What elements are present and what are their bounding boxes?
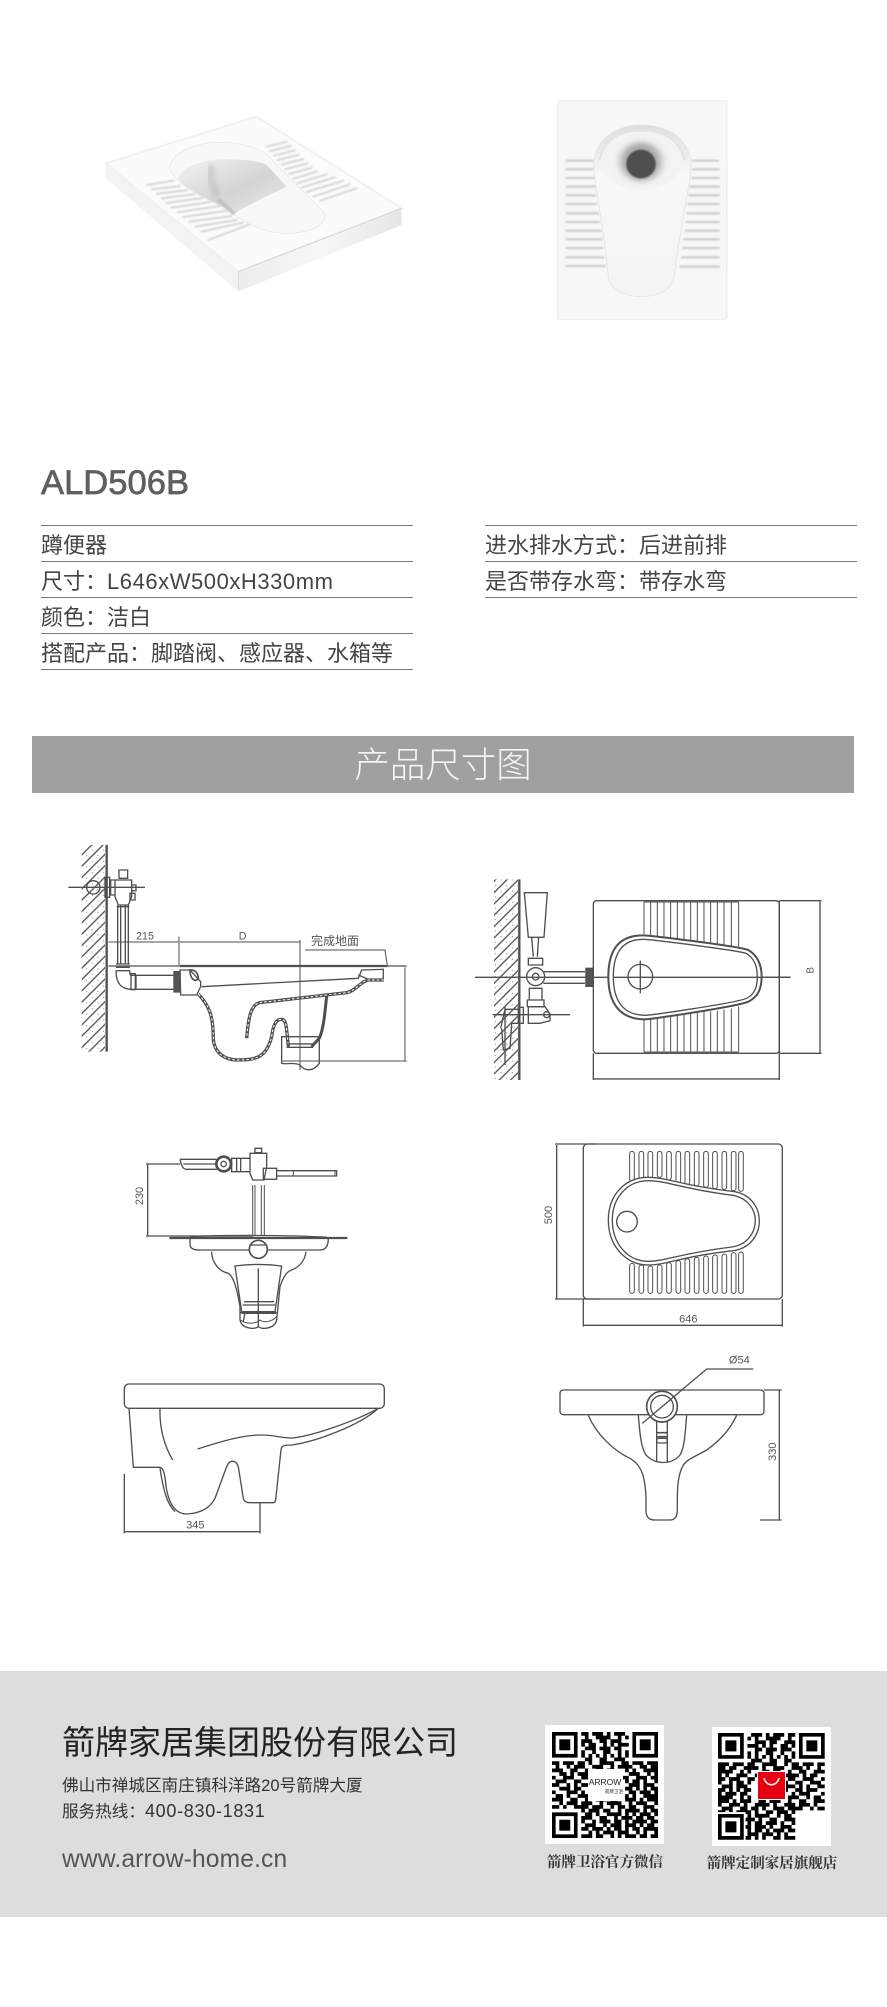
spec: type: 蹲便器 [41,533,107,558]
QR caption: flagship store: 箭牌定制家居旗舰店 [707,1854,838,1872]
product photo: top view [558,101,727,319]
spec: water inlet and outlet: 进水排水方式：后进前排 [485,533,727,558]
QR caption: bathroom WeChat: 箭牌卫浴官方微信 [547,1853,663,1871]
drawing: top view with valve [475,879,822,1080]
spec: size: 尺寸：L646xW500xH330mm [41,569,333,594]
ribs left [566,161,606,266]
bowl [594,125,691,297]
drawing: end profile [560,1354,782,1520]
dimensions: 500 [543,1206,555,1224]
dimensions [108,930,407,1070]
QR code: bathroom WeChat [545,1725,664,1844]
dimensions: 646 [679,1313,697,1325]
dimensions [642,1354,782,1520]
spec: accessories: 搭配产品：脚踏阀、感应器、水箱等 [41,641,393,666]
dimension 230: 230 [134,1187,146,1205]
service hotline: 服务热线：400-830-1831 [62,1801,265,1821]
dimensions: D [239,930,247,942]
drawing: top view with dimensions [543,1144,782,1327]
website: www.arrow-home.cn [62,1846,287,1873]
dimension 345 [124,1474,260,1533]
body [129,1408,378,1514]
trap [235,1264,282,1327]
dimension 345: 345 [186,1519,204,1531]
bowl [608,935,791,1019]
QR code: bathroom WeChat: ARROW [589,1777,621,1787]
valve [87,870,136,971]
section banner: dimension drawing [32,736,854,793]
bowl section [108,966,407,1070]
dimensions: 215 [136,930,154,942]
drain hole [647,1391,677,1422]
body [588,1415,737,1520]
drawing: front view with valve [134,1148,347,1328]
QR code: flagship store [712,1727,831,1846]
bowl [608,1177,759,1265]
model title: ALD506B [41,464,189,502]
valve [180,1148,337,1235]
wall [82,845,107,1052]
address: 佛山市禅城区南庄镇科洋路20号箭牌大厦 [62,1776,363,1795]
dimensions: 完成地面 [311,933,359,948]
dimensions [543,1144,782,1327]
rim [124,1384,384,1408]
spec: trap: 是否带存水弯：带存水弯 [485,569,727,594]
drawing: side section with valve [68,845,407,1070]
ribs [630,1151,743,1293]
rim [560,1390,764,1415]
ribs left [147,181,248,240]
section banner: dimension drawing: 产品尺寸图 [354,745,532,785]
QR codes [545,1725,838,1872]
company name: 箭牌家居集团股份有限公司 [62,1724,458,1761]
bowl [169,142,325,233]
pan [169,1235,347,1328]
pan outline [583,1144,782,1299]
ribs right [679,161,720,267]
footer panel [0,1671,887,1917]
spec: colour: 颜色：洁白 [41,605,151,630]
pipe [116,970,201,995]
wall [494,879,519,1080]
dimensions: 330 [767,1442,779,1461]
dimensions: Ø54 [729,1354,750,1366]
product photo: angled view [106,117,402,292]
dimensions [593,901,822,1080]
ribs right [267,142,357,201]
pan outline [593,901,779,1053]
QR code: bathroom WeChat: 箭牌卫浴 [605,1788,623,1795]
ribs [644,902,739,1052]
drawing: side profile [124,1384,384,1533]
spec table: right column [485,525,857,598]
dimension 230 [134,1164,253,1236]
dimensions: B [805,967,816,974]
spec table: left column [41,525,413,670]
valve and handle [501,893,593,1065]
